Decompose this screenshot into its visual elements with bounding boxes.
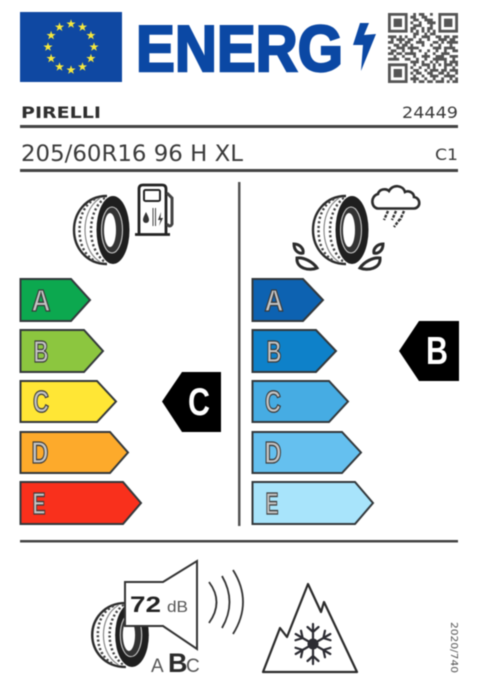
bar D — [20, 432, 128, 473]
icon: water splashes — [294, 244, 383, 269]
bar C — [252, 381, 348, 422]
supplier name: PIRELLI — [21, 103, 101, 122]
icon: fuel pump — [135, 185, 172, 234]
bar E: E — [32, 486, 46, 521]
tyre size: 205/60R16 96 H XL — [21, 142, 244, 167]
bar A — [252, 279, 323, 321]
bar E — [20, 482, 141, 524]
QR code — [388, 14, 458, 82]
bar D — [252, 432, 361, 473]
icon: rain cloud — [372, 186, 419, 227]
rating badge: fuel C: C — [188, 381, 210, 424]
icon: sound waves — [209, 570, 243, 634]
bar B: B — [266, 334, 282, 369]
bar C: C — [33, 384, 49, 419]
bar D: D — [32, 435, 48, 470]
rule under supplier — [20, 125, 458, 128]
icon: tyre, fuel efficiency — [74, 195, 130, 265]
panel: fuel efficiency scale — [20, 279, 141, 524]
icon: speaker with noise value — [125, 561, 197, 649]
tyre class: C1 — [435, 145, 458, 164]
bar E: E — [266, 486, 278, 521]
title: ENERG: ENERG — [136, 12, 343, 85]
divider between panels — [238, 182, 240, 526]
bar C: C — [265, 384, 281, 419]
rule above pictograms — [20, 540, 458, 542]
noise value: 72 — [130, 592, 161, 617]
panel: wet grip scale — [252, 279, 373, 524]
noise class ABC: B — [168, 648, 188, 678]
icon: tyre, wet grip — [313, 195, 370, 265]
bar C — [20, 381, 116, 422]
noise class ABC: A — [151, 656, 164, 677]
noise class ABC: C — [186, 656, 200, 677]
bar E — [252, 482, 373, 524]
model identifier: 24449 — [402, 103, 458, 122]
EU flag — [20, 12, 122, 82]
bar A: A — [264, 283, 284, 318]
bar B: B — [34, 334, 48, 369]
icon: three-peak mountain snowflake — [263, 584, 357, 672]
bar A: A — [32, 283, 50, 318]
rating badge: wet grip B: B — [426, 330, 448, 373]
rule under size — [20, 169, 458, 172]
bar A — [20, 279, 90, 321]
rating badge: wet grip B — [399, 321, 459, 381]
bar D: D — [264, 435, 282, 470]
bar B — [252, 330, 336, 372]
icon: lightning bolt — [353, 23, 376, 71]
rating badge: fuel C — [162, 372, 221, 432]
regulation number: 2020/740 — [448, 622, 459, 673]
bar B — [20, 330, 103, 372]
noise unit: dB — [167, 599, 188, 616]
icon: tyre, noise — [92, 602, 150, 668]
noise class ABC — [151, 648, 200, 678]
